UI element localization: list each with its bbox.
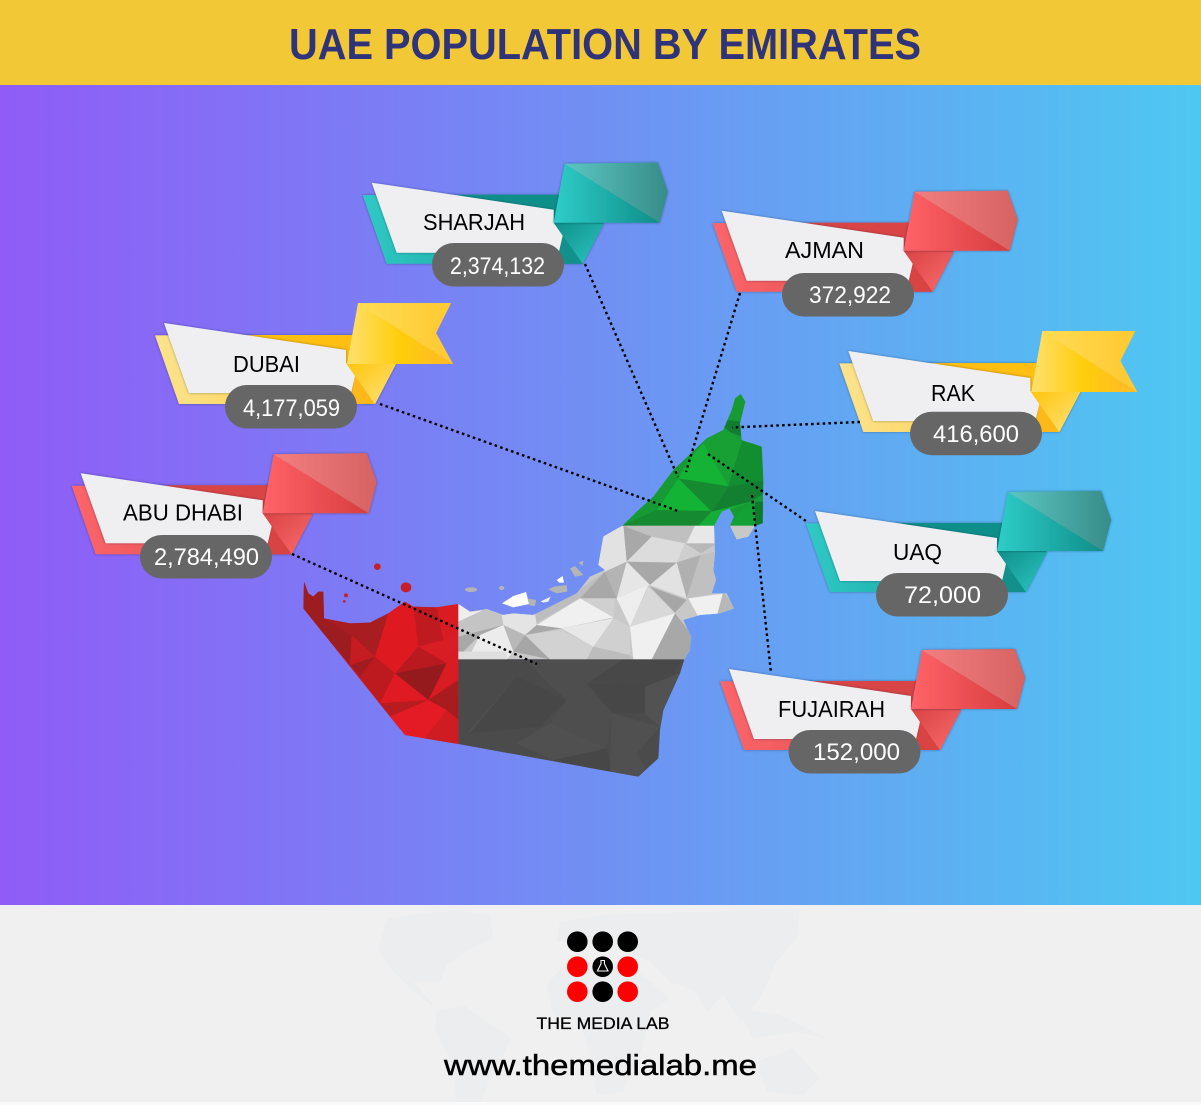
logo wordmark: THE MEDIA LAB	[536, 1015, 670, 1033]
ribbon: Abu Dhabi: ABU DHABI	[123, 500, 243, 526]
ribbon: Ajman	[713, 191, 1018, 316]
ribbon: Sharjah: SHARJAH	[423, 209, 525, 235]
ribbon: Dubai	[155, 303, 453, 428]
islands	[343, 561, 583, 607]
ribbon: Fujairah	[720, 649, 1025, 774]
ribbon: Sharjah: 2,374,132	[450, 253, 545, 280]
ribbon: Ajman: AJMAN	[785, 237, 864, 263]
ribbon: UAQ: UAQ	[893, 539, 942, 565]
ribbon: UAQ	[806, 491, 1111, 616]
ribbon: Dubai: DUBAI	[233, 351, 300, 377]
white stripe facets	[458, 526, 757, 659]
ribbon: Fujairah: 152,000	[813, 739, 900, 766]
footer panel	[0, 931, 1201, 1105]
low-poly UAE flag map	[300, 390, 767, 779]
faint world map	[378, 908, 827, 1105]
ribbon: Ajman: 372,922	[809, 282, 891, 309]
background gradient	[0, 85, 1201, 905]
ribbon: Sharjah	[363, 163, 668, 286]
ribbon: RAK: 416,600	[933, 421, 1019, 448]
green stripe facets	[622, 420, 765, 526]
ribbon: Dubai: 4,177,059	[243, 395, 340, 422]
header band	[0, 0, 1201, 85]
ribbon: Fujairah: FUJAIRAH	[778, 696, 885, 722]
ribbon: Abu Dhabi	[72, 453, 377, 578]
ribbon: RAK	[839, 331, 1137, 455]
website url: www.themedialab.me	[443, 1050, 757, 1082]
dotted connector lines	[292, 264, 860, 673]
title: UAE POPULATION BY EMIRATES	[289, 20, 921, 69]
red facets	[303, 580, 458, 745]
ribbon: Abu Dhabi: 2,784,490	[154, 544, 259, 571]
black stripe facets	[458, 659, 683, 778]
ribbon: RAK: RAK	[931, 380, 976, 406]
ribbon: UAQ: 72,000	[904, 582, 981, 609]
map body clipped to outline	[300, 390, 767, 779]
logo: The Media Lab dots	[567, 931, 638, 1002]
